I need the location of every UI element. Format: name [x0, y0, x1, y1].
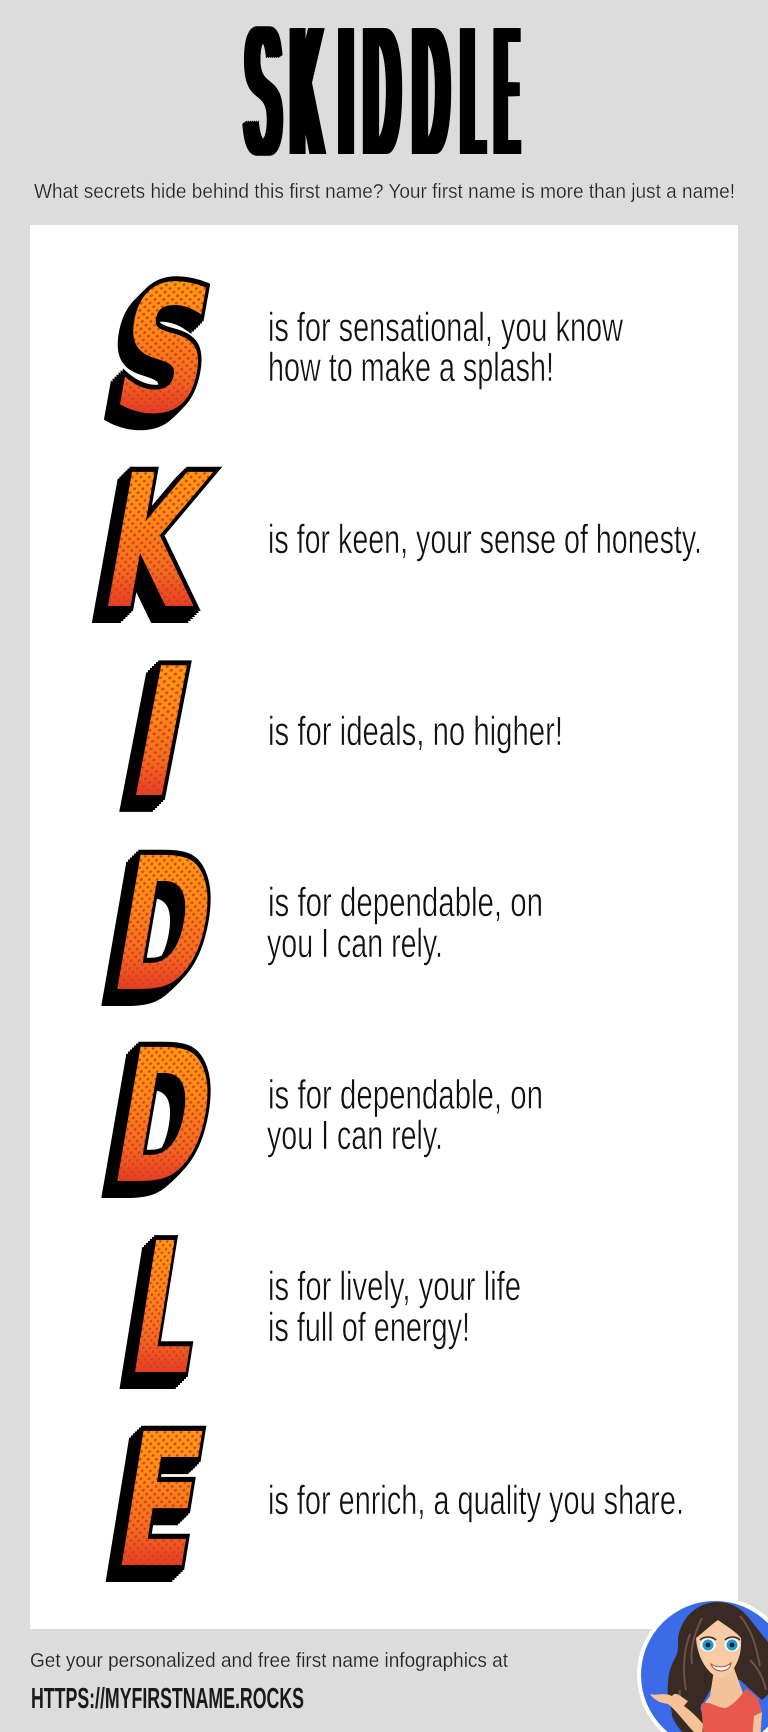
subtitle: What secrets hide behind this first name? Your first name is more than just a name!	[34, 180, 735, 203]
text S: how to make a splash!	[268, 344, 554, 390]
text I: is for ideals, no higher!	[268, 708, 563, 754]
letter I: I	[115, 629, 207, 837]
letter E: E	[104, 1394, 218, 1609]
row E	[104, 1394, 684, 1609]
text D one: you I can rely.	[267, 920, 443, 966]
row I	[115, 629, 563, 837]
row D one	[99, 819, 543, 1033]
arm right	[752, 1712, 762, 1732]
row K	[89, 436, 702, 651]
shirt	[701, 1688, 762, 1732]
letter S: S	[101, 249, 228, 453]
letter D two: D	[99, 1011, 229, 1225]
title	[242, 0, 522, 193]
text D two: you I can rely.	[267, 1112, 443, 1158]
text L	[268, 1263, 521, 1350]
hand	[650, 1694, 703, 1732]
panel: letters	[30, 225, 738, 1629]
text S: is for sensational, you know	[268, 304, 623, 350]
text D two: is for dependable, on	[268, 1072, 543, 1118]
text D one: is for dependable, on	[268, 879, 543, 925]
neck	[704, 1668, 743, 1708]
text L: is full of energy!	[268, 1304, 470, 1350]
row D two	[99, 1011, 543, 1225]
row L	[119, 1205, 521, 1415]
text D two	[267, 1072, 543, 1158]
icon: avatar	[637, 1597, 768, 1732]
footer prompt: Get your personalized and free first name infographics at	[30, 1650, 508, 1672]
hair	[668, 1602, 768, 1732]
footer url: HTTPS://MYFIRSTNAME.ROCKS	[31, 1683, 304, 1715]
letter D one: D	[99, 819, 229, 1033]
text L: is for lively, your life	[268, 1263, 521, 1309]
text D one	[267, 879, 543, 966]
letter L: L	[119, 1205, 215, 1415]
face	[696, 1620, 741, 1678]
letter K: K	[89, 436, 224, 651]
text S	[268, 304, 623, 390]
row S	[101, 249, 623, 453]
